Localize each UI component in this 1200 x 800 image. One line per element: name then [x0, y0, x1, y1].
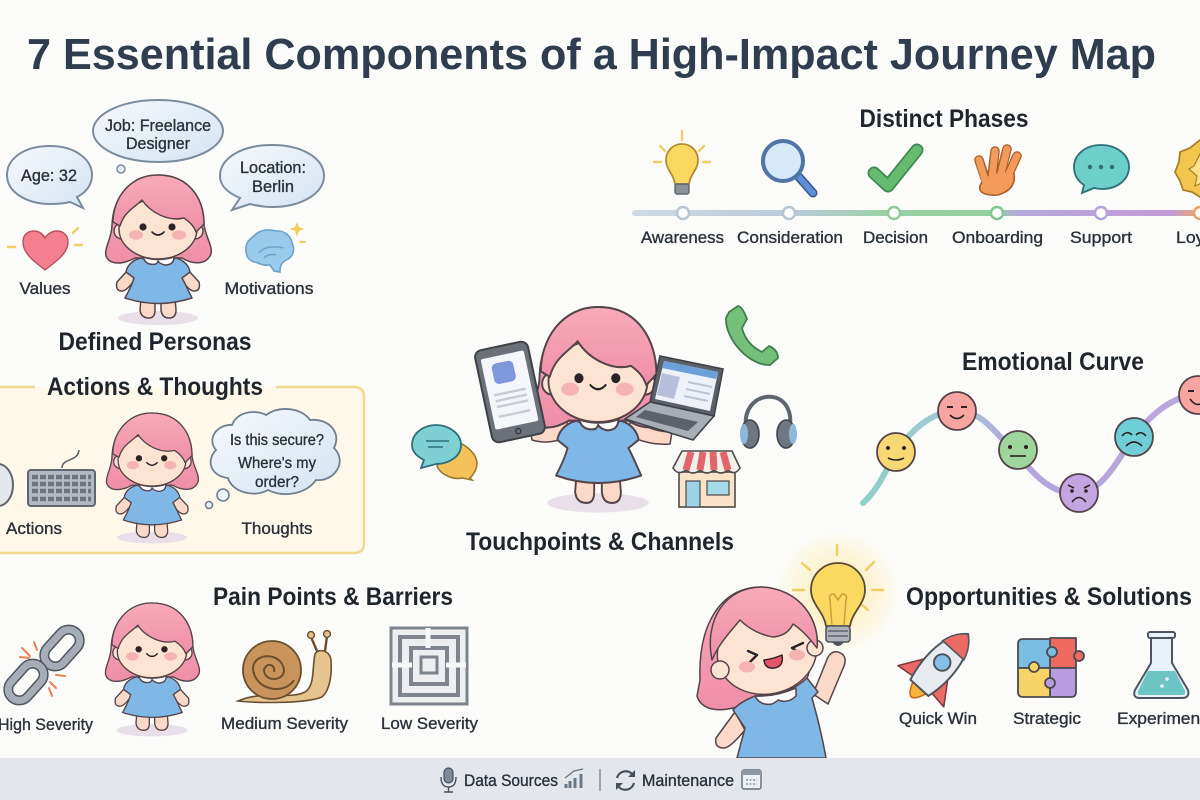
- icon: headphones: [740, 397, 797, 448]
- icon: flask: [1134, 632, 1188, 698]
- icon: maze: [391, 628, 467, 704]
- face: pink happy: [938, 392, 976, 430]
- icon: support bubble: [1074, 145, 1129, 193]
- icon: sync: [616, 770, 635, 790]
- phase labels: Support: [1070, 228, 1132, 247]
- label: data sources: Data Sources: [464, 771, 558, 790]
- label: values: Values: [20, 279, 70, 298]
- icon: job bubble: Designer: [126, 134, 190, 153]
- icon: thought cloud: Where's my: [238, 455, 316, 472]
- icon: magnifier: [763, 141, 813, 193]
- label: high severity: High Severity: [0, 715, 93, 734]
- footer bar: [0, 758, 1200, 800]
- panel: actions and thoughts: [0, 373, 364, 553]
- label: medium severity: Medium Severity: [221, 714, 348, 733]
- icon: heart: [8, 228, 82, 270]
- phase labels: Decision: [863, 228, 928, 247]
- character: pain points: [105, 603, 199, 736]
- curve line: [863, 393, 1198, 503]
- face: purple upset: [1060, 474, 1098, 512]
- icon: location bubble: Location:: [240, 158, 306, 177]
- title: 7 Essential Components of a High-Impact Journey Map: [27, 30, 1156, 79]
- icon: phone handset: [726, 306, 778, 365]
- face: pink joyful: [1179, 376, 1200, 414]
- icon: lightbulb: [654, 131, 710, 194]
- icon: mouse: [0, 464, 13, 506]
- heading: actions and thoughts: Actions & Thoughts: [47, 373, 263, 401]
- icon: snail: [238, 631, 331, 702]
- icon: puzzle: [1018, 638, 1084, 697]
- heading: touchpoints and channels: Touchpoints & Channels: [466, 528, 734, 556]
- character: actions: [106, 413, 198, 544]
- face: yellow neutral-happy: [877, 433, 915, 471]
- panel: defined personas: [7, 100, 324, 325]
- icon: laptop: [625, 356, 723, 440]
- label: maintenance: Maintenance: [642, 771, 734, 790]
- phase labels: [641, 228, 1200, 247]
- character: touchpoints: [530, 307, 672, 512]
- icon: phone: [474, 340, 546, 444]
- heading: emotional curve: Emotional Curve: [962, 348, 1144, 376]
- icon: thought cloud: order?: [255, 474, 299, 491]
- icon: job bubble: [93, 100, 223, 173]
- icon: thought cloud: [206, 409, 340, 508]
- heading: distinct phases: Distinct Phases: [860, 105, 1028, 133]
- character: excited girl: [697, 587, 845, 758]
- persona character: [106, 175, 211, 325]
- panel: emotional curve: [863, 348, 1200, 512]
- icon: checkmark: [874, 150, 917, 186]
- panel: distinct phases: [632, 105, 1200, 247]
- label: actions: Actions: [6, 519, 62, 538]
- icon: glowing lightbulb: [776, 530, 900, 654]
- icon: broken chain: [4, 625, 84, 705]
- heading: defined personas: Defined Personas: [58, 328, 252, 356]
- icon: keyboard: [28, 450, 95, 506]
- icon: age bubble: Age: 32: [21, 166, 77, 185]
- icon: waving hand: [979, 149, 1017, 195]
- icon: chat bubbles: [412, 425, 477, 480]
- divider: [599, 769, 601, 791]
- panel: touchpoints and channels: [412, 306, 797, 556]
- icon: location bubble: [220, 145, 324, 210]
- icon: loyalty badge: [1175, 140, 1200, 197]
- panel: opportunities and solutions: [697, 530, 1200, 758]
- label: quick win: Quick Win: [899, 709, 977, 728]
- face: teal worried: [1115, 418, 1153, 456]
- label: motivations: Motivations: [224, 279, 314, 298]
- label: strategic: Strategic: [1013, 709, 1081, 728]
- heading: pain points: Pain Points & Barriers: [213, 583, 453, 611]
- icon: calendar: [742, 770, 761, 789]
- icon: bar chart: [565, 769, 583, 788]
- label: thoughts: Thoughts: [242, 519, 312, 538]
- label: low severity: Low Severity: [381, 714, 478, 733]
- icon: brain: [246, 222, 305, 272]
- face: green neutral: [999, 431, 1037, 469]
- phase labels: Awareness: [641, 228, 724, 247]
- phase labels: Consideration: [737, 228, 843, 247]
- panel: pain points and barriers: [0, 583, 478, 736]
- icon: storefront: [673, 451, 740, 507]
- timeline: [632, 207, 1200, 219]
- icon: age bubble: [7, 146, 92, 208]
- icon: thought cloud: Is this secure?: [230, 432, 324, 449]
- phase labels: Onboarding: [952, 228, 1043, 247]
- icon: location bubble: Berlin: [252, 177, 294, 196]
- icon: job bubble: Job: Freelance: [105, 116, 211, 135]
- icon: microphone: [441, 768, 456, 792]
- icon: rocket: [888, 613, 991, 717]
